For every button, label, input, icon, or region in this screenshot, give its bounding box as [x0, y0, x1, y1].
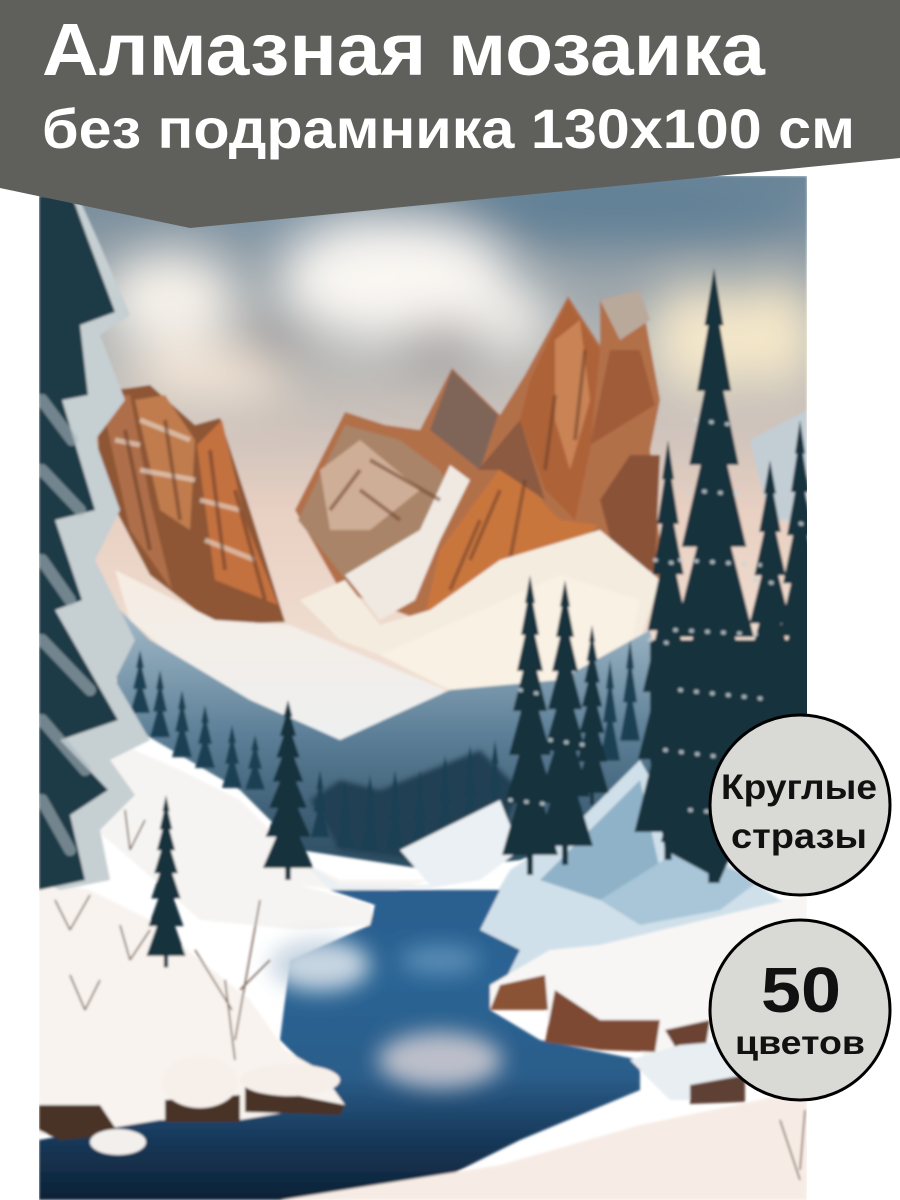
badge: 50 colours: 50: [761, 954, 841, 1026]
subtitle: без подрамника 130х100 см: [42, 97, 855, 160]
mountains: left massif: [95, 385, 285, 625]
snow foreground right with rocks: [280, 895, 807, 1200]
header banner: [0, 0, 900, 228]
river: [39, 890, 640, 1200]
badge: round rhinestones: [710, 715, 890, 895]
left foreground pine: [39, 196, 150, 890]
snow banks mid: [101, 750, 784, 974]
snow highlights on right pine: [510, 420, 807, 815]
snow slopes: [115, 530, 660, 740]
mountains: center massif: [295, 290, 665, 640]
right distant ridge: [750, 410, 807, 520]
title: Алмазная мозаика: [42, 8, 766, 91]
badge: 50 colours: [710, 920, 890, 1100]
painting: winter mountain river landscape: [39, 173, 828, 1200]
badge: round rhinestones: Круглые: [721, 768, 877, 807]
tall pine trees: [146, 268, 828, 968]
badge: 50 colours: цветов: [735, 1024, 865, 1061]
clouds: [105, 173, 820, 401]
forest valley: [110, 600, 680, 870]
badge: round rhinestones: стразы: [731, 817, 867, 856]
snow foreground left: [39, 880, 345, 1155]
bare bushes: [55, 810, 805, 1180]
sky: [39, 176, 807, 736]
